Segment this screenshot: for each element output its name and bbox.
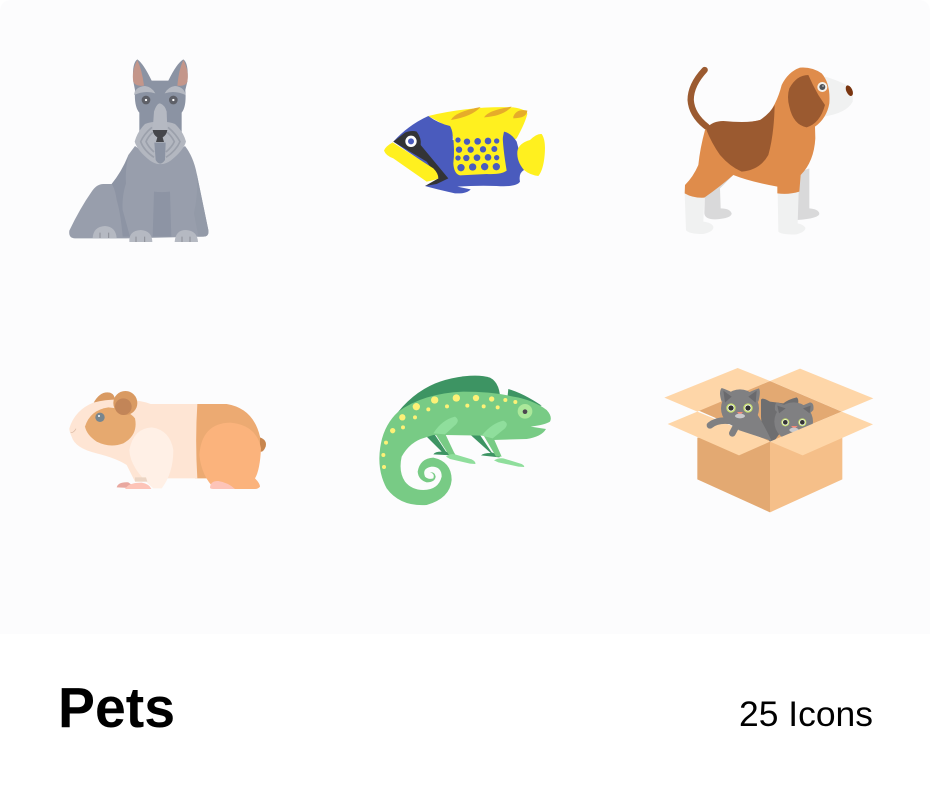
box: front right flap bbox=[770, 412, 873, 455]
icon: chameleon bbox=[379, 376, 551, 505]
icon: beagle dog bbox=[685, 68, 854, 234]
box: right side bbox=[770, 438, 842, 512]
cat: rear bbox=[761, 397, 814, 442]
icon: tropical fish bbox=[384, 107, 545, 193]
icon: schnauzer dog bbox=[69, 59, 208, 242]
icon count: 25 Icons bbox=[739, 695, 873, 734]
icon: guinea pig bbox=[69, 391, 266, 489]
title: Pets bbox=[58, 676, 175, 740]
box: front left flap bbox=[668, 412, 770, 455]
icon: cats in cardboard box bbox=[664, 368, 873, 512]
cat: front bbox=[710, 388, 772, 441]
box: left side bbox=[697, 438, 770, 512]
